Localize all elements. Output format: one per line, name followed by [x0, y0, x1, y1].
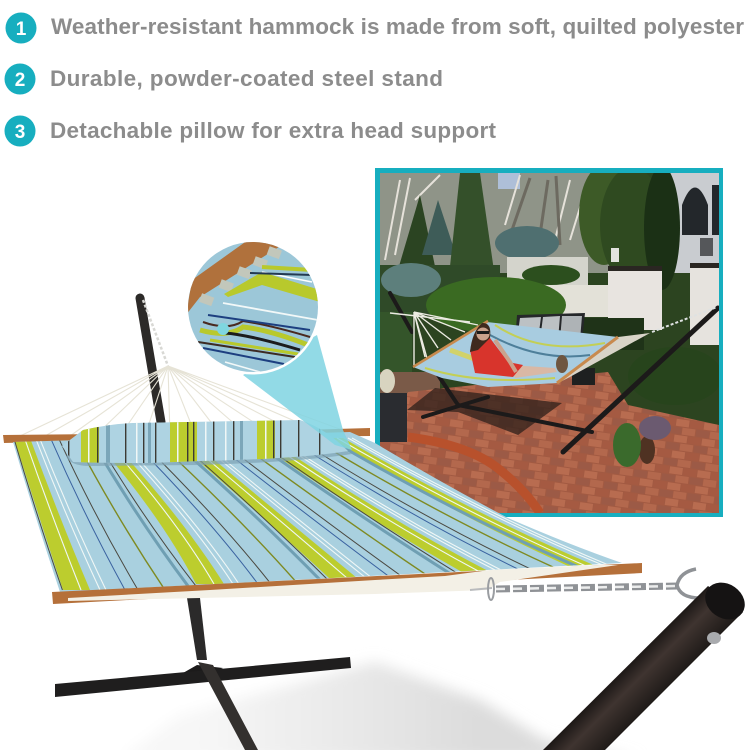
top spreader bar [3, 428, 370, 443]
panel: lifestyle photo [375, 165, 723, 517]
dark stripes [14, 438, 537, 590]
plant [639, 436, 655, 464]
stand: upper pole [140, 298, 161, 422]
side table [380, 393, 407, 442]
patio bricks [380, 372, 719, 513]
feature text 2: Durable, powder-coated steel stand [50, 66, 443, 91]
rope fringe [68, 565, 618, 601]
stand in photo [390, 293, 718, 452]
hammock in photo [413, 322, 618, 387]
badge 1 [6, 12, 36, 44]
s-hook [677, 569, 700, 598]
badge 3: 3 [15, 122, 25, 143]
top chain [143, 300, 168, 366]
feature text 1: Weather-resistant hammock is made from soft, quilted polyester [51, 14, 744, 39]
storage box [516, 313, 585, 333]
heading: feature list [4, 12, 744, 146]
bottom spreader bar [52, 563, 642, 604]
hammock mat with stripes [13, 432, 622, 592]
feature text 3: Detachable pillow for extra head support [50, 118, 496, 143]
badge 2: 2 [15, 70, 25, 91]
badge 2 [4, 64, 36, 94]
steel stripes [104, 444, 578, 586]
stand base [55, 598, 351, 750]
ground shadow [120, 662, 640, 750]
pillow shadow [66, 448, 352, 466]
navy stripes [50, 438, 524, 590]
callout beam [243, 335, 352, 450]
woman [514, 366, 557, 378]
chain [470, 569, 700, 600]
large pole end [543, 575, 750, 750]
white stripes [24, 438, 611, 590]
badge 1: 1 [16, 19, 27, 40]
lime stripes [14, 438, 596, 590]
spreader ropes [20, 366, 345, 436]
pillow [62, 420, 348, 463]
callout circle: pillow detail [185, 240, 325, 375]
olive stripes [87, 452, 554, 587]
badge 3 [4, 116, 36, 146]
ropes [390, 312, 478, 365]
